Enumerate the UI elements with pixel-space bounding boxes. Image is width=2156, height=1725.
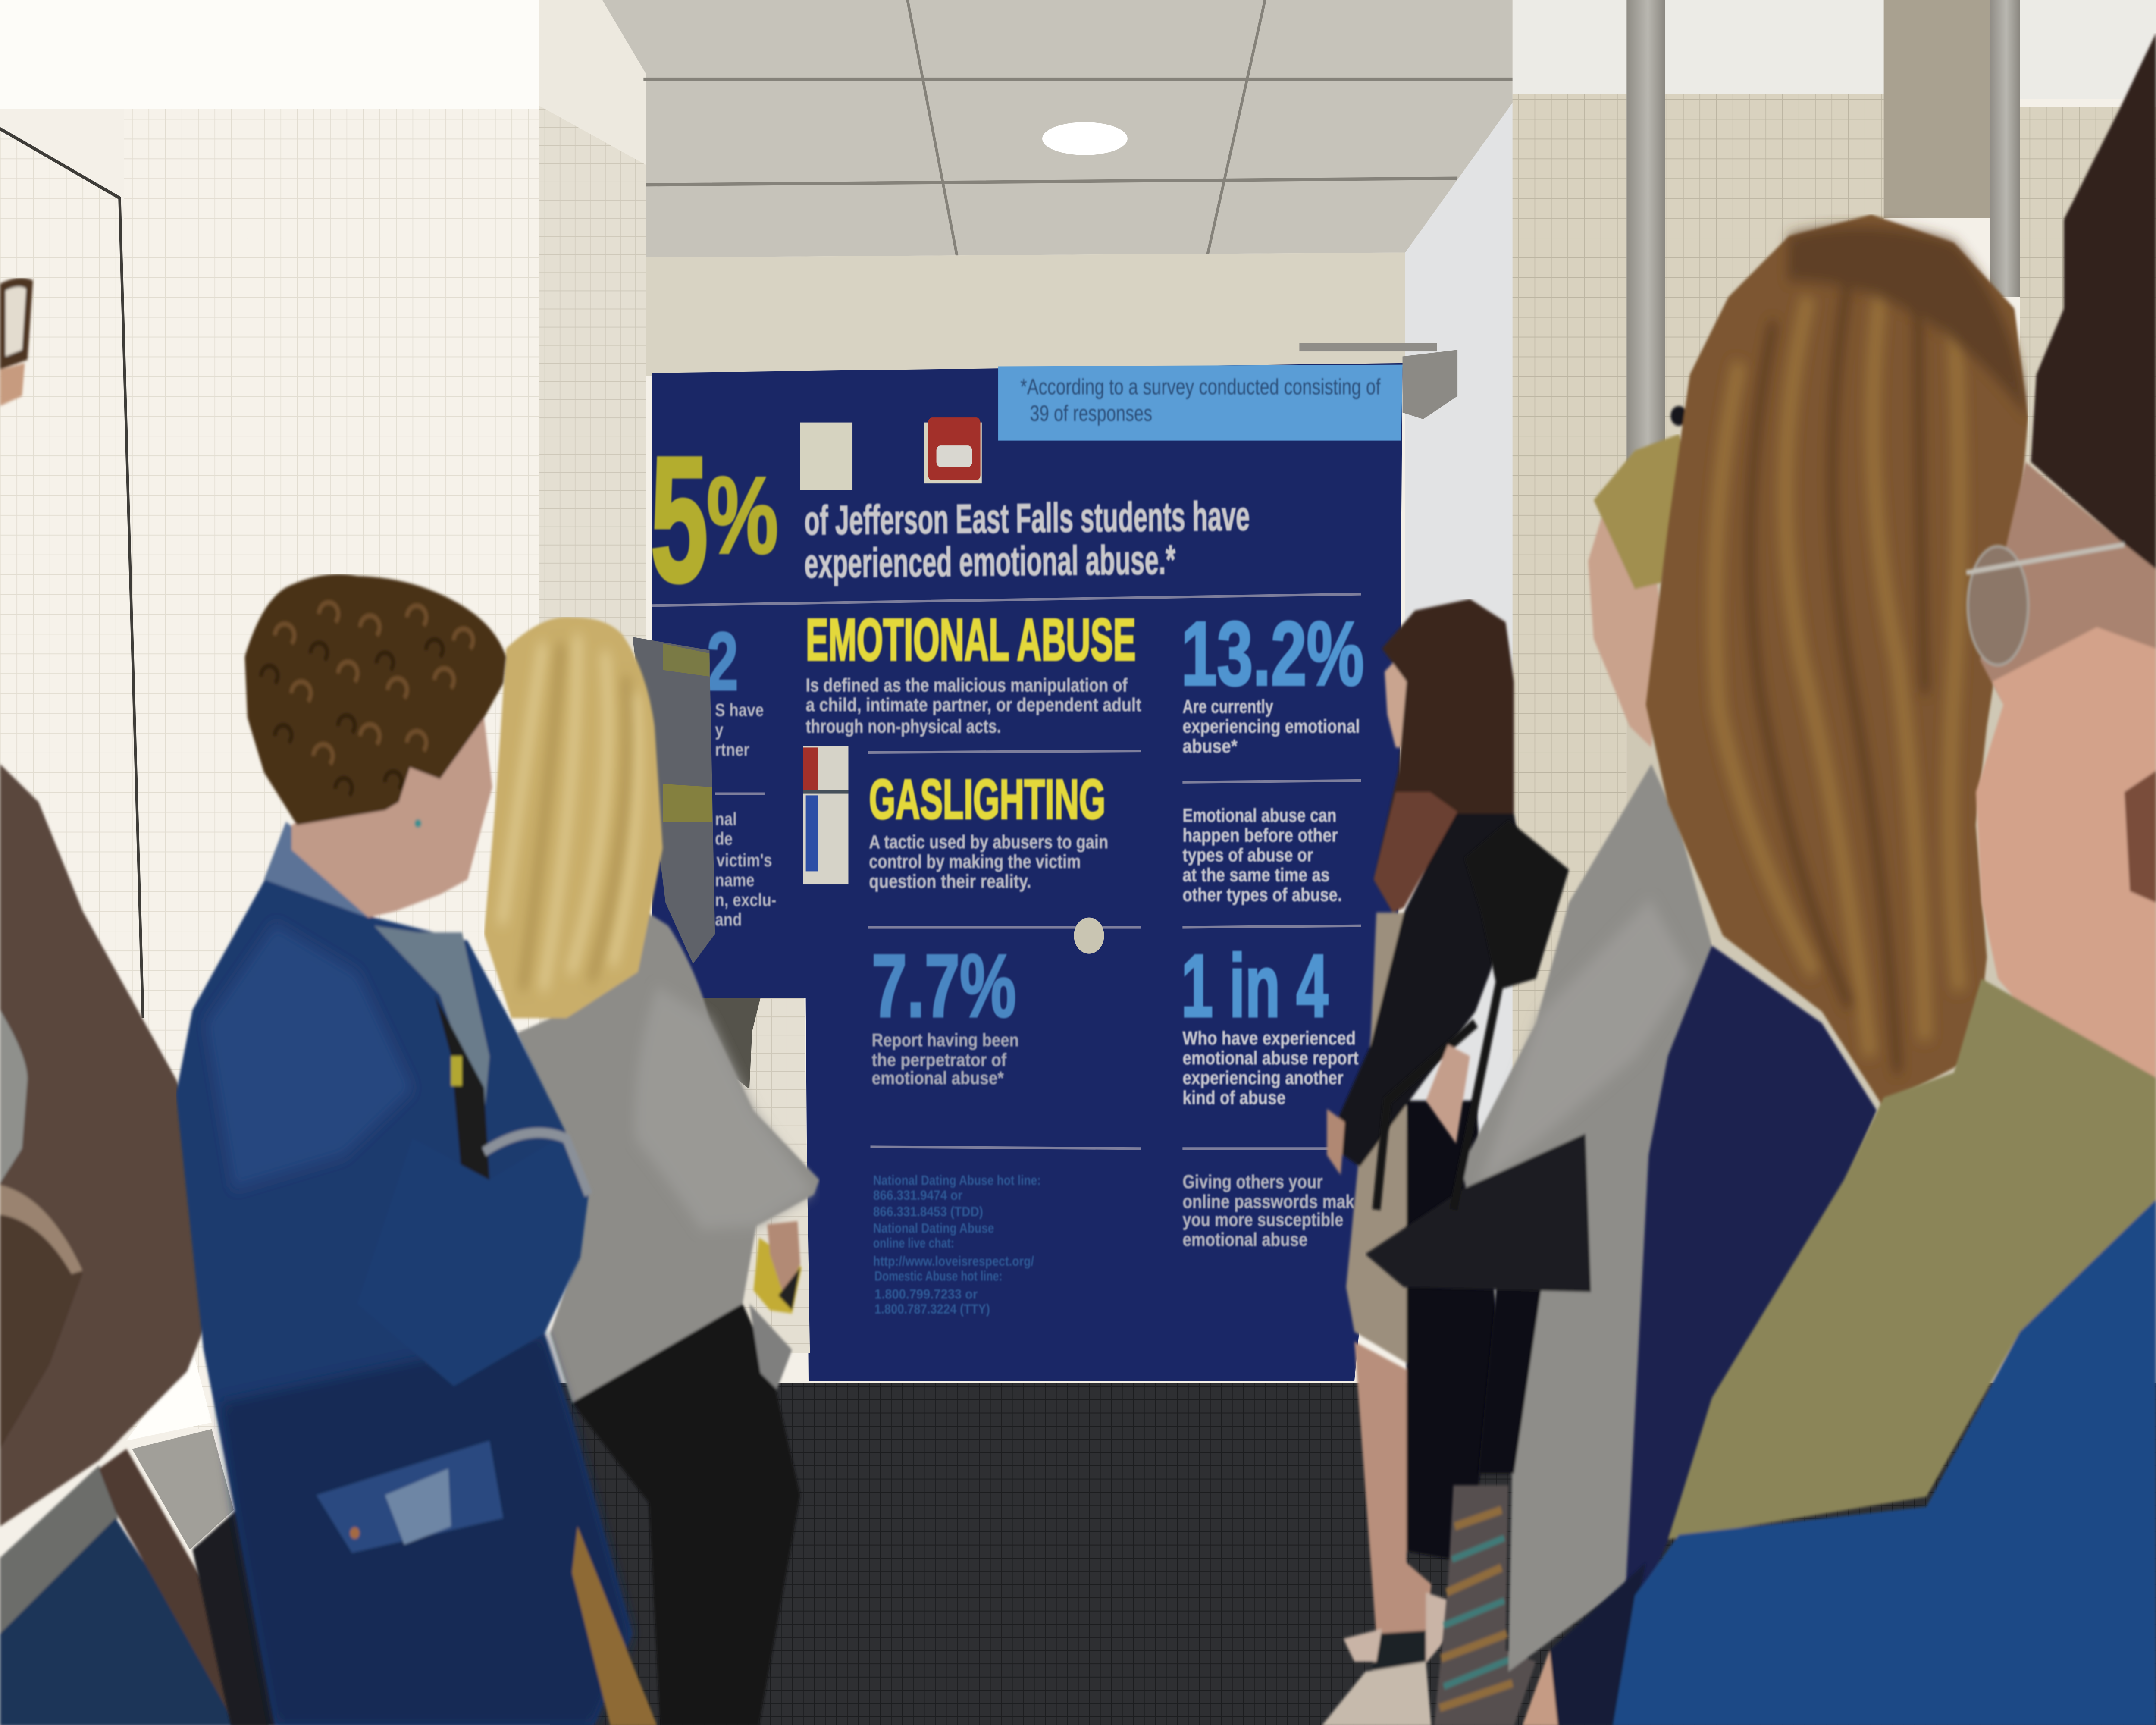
hoodie sleeve highlight [635,987,814,1229]
wall cutout with signage [803,746,848,884]
hotline text: http://www.loveisrespect.org/ [873,1254,1034,1269]
earring [414,819,421,828]
pocket flap [316,1441,503,1553]
main statement: of Jefferson East Falls students have [804,492,1250,543]
black lower garment [1478,1276,1542,1474]
blonde hair [1594,434,1690,589]
overlap text [1182,804,1342,905]
face [1588,517,1662,747]
grey cardigan [1462,764,1712,1672]
left column face [539,0,646,891]
floor [550,1383,2156,1725]
partly hidden left column statistic: rtner [715,740,749,760]
face and neck [291,718,492,918]
partly hidden left column statistic: nal [715,809,737,829]
patterned skirt [1434,1485,1536,1725]
heading: gaslighting: GASLIGHTING [869,768,1106,831]
gaslighting definition [869,831,1108,892]
undershirt [0,1010,28,1183]
main statement [804,492,1250,586]
ceiling tile grid [643,0,1515,256]
navy top [1623,946,1877,1650]
hotline text: 1.800.787.3224 (TTY) [874,1302,990,1317]
hand [1426,1044,1470,1144]
left wall upper plain section [0,0,539,109]
grey hoodie [517,903,820,1403]
hotline text: online live chat: [873,1236,954,1251]
wrist [1522,1650,1558,1725]
fire alarm strobe [924,417,982,483]
jeans [0,1518,250,1725]
tote bag body [1365,1134,1591,1292]
jacket lower shadow [220,1333,633,1725]
phone and hand [753,1221,802,1314]
emotional abuse definition: through non-physical acts. [806,715,1001,737]
olive top [1668,979,2156,1540]
overlap text: at the same time as [1182,864,1330,885]
black trousers [572,1304,800,1725]
right corridor wall [1405,99,1515,1386]
hair strands [1715,264,1959,1056]
divider lines [652,594,1361,1148]
forearm with light band [0,1183,82,1449]
blonde hair [484,617,663,1018]
cardigan sleeve highlight [1478,899,1691,1188]
sink counter [132,1429,234,1549]
perpetrator text: the perpetrator of [872,1050,1006,1070]
right wall tile column [1513,94,1626,1414]
gaslighting definition: A tactic used by abusers to gain [869,831,1108,853]
hair strands [502,635,638,990]
door closer [1299,343,1457,419]
hair clip [1670,406,1687,426]
hotline text: National Dating Abuse [873,1221,994,1236]
hotline text: Domestic Abuse hot line: [874,1269,1003,1284]
dark hair [2031,33,2156,573]
hotline text: 866.331.9474 or [873,1188,962,1203]
overlap text: happen before other [1182,824,1338,846]
partly hidden left column statistic: victim's [716,850,772,871]
1 in 4 text: kind of abuse [1182,1087,1286,1108]
poster background [652,363,1403,1381]
survey note box [998,365,1403,441]
1 in 4 text [1182,1027,1359,1108]
overlap text: other types of abuse. [1182,884,1342,905]
hand [1327,1109,1345,1175]
hotline text: National Dating Abuse hot line: [873,1173,1041,1188]
curly hair [245,574,506,825]
inner shirt [374,926,489,1119]
legs [1354,1342,1432,1639]
heading: emotional abuse: EMOTIONAL ABUSE [806,606,1136,673]
metal pipe [1626,0,1665,495]
perpetrator text [872,1030,1019,1088]
big statistic 75%: % [707,455,778,576]
person: dark hair, black top and beige dress [1321,599,1525,1725]
person: blonde hair, grey hoodie [484,617,820,1725]
currently experiencing text: Are currently [1182,696,1273,717]
1 in 4 text: emotional abuse report [1182,1047,1359,1069]
emotional abuse definition: Is defined as the malicious manipulation of [806,674,1128,696]
survey note box: 39 of responses [1030,401,1152,426]
gaslighting definition: control by making the victim [869,851,1081,872]
sock [1372,1631,1426,1670]
plexiglass holder reflecting poster [633,637,715,964]
left wall tiles [124,109,539,1429]
person: long auburn hair, navy top [1623,214,2028,1650]
partly hidden left column statistic: de [715,829,733,849]
currently experiencing text: experiencing emotional [1182,715,1360,737]
hotline text [873,1173,1041,1317]
metal panel [1884,0,1994,218]
hair [1374,599,1514,913]
ceiling [602,0,1515,257]
partly hidden left column statistic: y [715,720,724,740]
sweater arm [0,764,220,1527]
glasses at left edge [0,278,33,370]
second metal pipe [1990,0,2020,297]
gaslighting definition: question their reality. [869,870,1031,892]
ceiling light [1042,122,1128,155]
fluffy bag [749,1304,792,1389]
face [1385,649,1407,747]
partly hidden left column statistic: 2 [707,616,738,708]
beige dress [1346,913,1409,1365]
overlap text: Emotional abuse can [1182,804,1336,826]
perpetrator text: Report having been [872,1030,1019,1051]
emotional abuse definition: a child, intimate partner, or dependent adult [806,694,1141,715]
1 in 4 text: Who have experienced [1182,1027,1356,1049]
passwords text [1182,1171,1354,1250]
person: short blonde hair, grey cardigan [1365,434,1712,1725]
main statement: experienced emotional abuse.* [804,536,1176,586]
wall cutout square [800,423,852,490]
jacket shoulder highlight [206,924,413,1188]
bag top [1464,820,1569,990]
currently experiencing text: abuse* [1182,735,1238,757]
left column tiles [539,106,646,1056]
emotional abuse definition [806,674,1141,737]
right wall upper plain section [1513,0,2156,99]
poster [633,363,1403,1381]
blue jacket [1613,1200,2156,1725]
right wall tiles [1626,495,2156,1419]
perpetrator text: emotional abuse* [872,1068,1004,1088]
back wall [646,252,1405,376]
partly hidden left column statistic [707,616,776,930]
partly hidden left column statistic: name [715,870,755,891]
survey note box: *According to a survey conducted consisting of [1020,375,1381,399]
big statistic 75% [650,420,778,619]
curl texture [261,602,473,795]
passwords text: emotional abuse [1182,1229,1308,1250]
shoes [1321,1593,1451,1725]
collar [264,822,388,918]
wall hole [1074,918,1104,954]
cuff [484,1133,589,1195]
far right tiles [2020,107,2156,503]
black bag behind [192,1510,286,1725]
black coat lower [1407,1101,1498,1563]
hand at face [1976,627,2156,1098]
folded arm [357,1134,589,1386]
1 in 4 text: experiencing another [1182,1067,1344,1088]
grey waist shirt [0,1465,118,1634]
statistic 1 in 4: 1 in 4 [1181,936,1328,1036]
tiled pillar with sink covering poster corner [699,998,810,1353]
hotline text: 1.800.799.7233 or [874,1287,978,1302]
overlap text: types of abuse or [1182,844,1313,866]
mirror on left wall [0,129,143,1018]
passwords text: online passwords mak [1182,1191,1354,1212]
partly hidden left column statistic: and [715,910,742,930]
currently experiencing text [1182,696,1360,757]
glasses [1966,545,2125,665]
denim jacket [176,871,633,1725]
cardigan edge [99,1449,270,1725]
partly hidden left column statistic: n, exclu- [715,890,776,910]
auburn hair [1646,214,2028,1106]
person: curly hair, denim jacket [176,574,657,1725]
big statistic 75%: 5 [650,420,708,619]
person: far left in brown sweater [0,278,270,1725]
partly hidden left column statistic: S have [715,700,764,720]
statistic 7.7%: 7.7% [872,936,1016,1036]
face [1980,462,2156,705]
dark cuff [1550,1563,1646,1725]
statistic 13.2%: 13.2% [1181,603,1364,705]
black top [1327,813,1525,1167]
hotline text: 866.331.8453 (TDD) [873,1204,983,1220]
bag straps [1376,913,1514,1210]
passwords text: Giving others your [1182,1171,1323,1192]
passwords text: you more susceptible [1182,1209,1343,1230]
tan trousers [572,1527,657,1725]
person: foreground with glasses, olive top and blue jacket [1522,33,2156,1725]
graphic tee [435,995,489,1180]
